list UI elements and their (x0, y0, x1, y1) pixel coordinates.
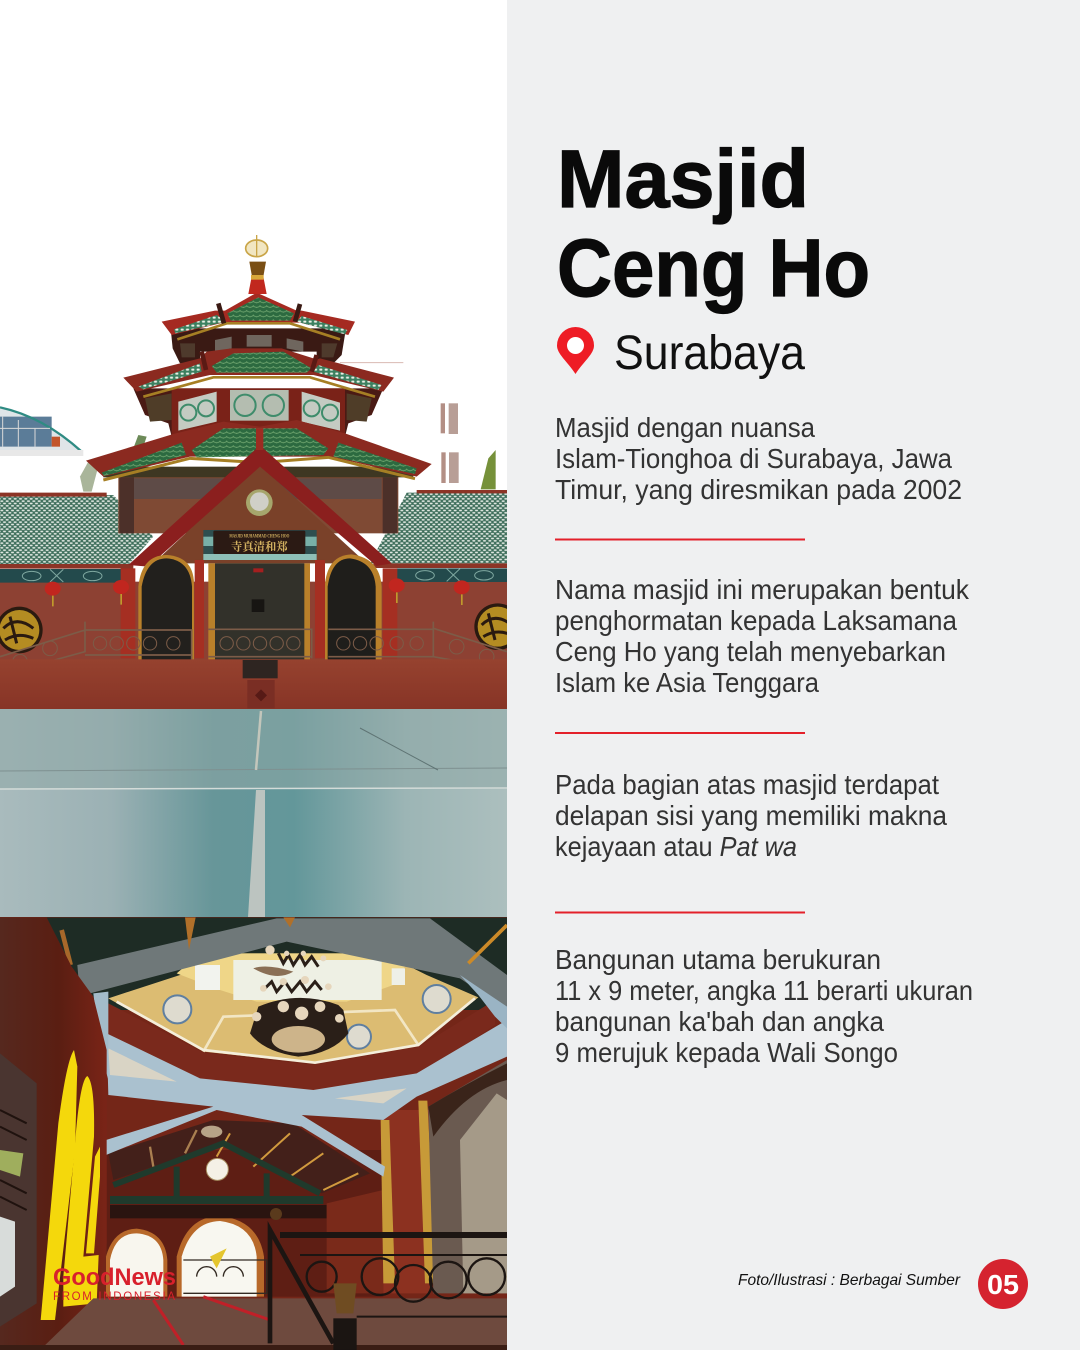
second tier roof (123, 348, 394, 397)
text block 2 (555, 574, 970, 698)
title: Masjid (557, 134, 809, 225)
text block 3: delapan sisi yang memiliki makna (555, 800, 947, 831)
text block 3: Pada bagian atas masjid terdapat (555, 769, 939, 800)
plaque (243, 660, 278, 708)
wooden roof ribs (108, 1120, 370, 1193)
photo credit: Foto/Ilustrasi : Berbagai Sumber (738, 1272, 961, 1289)
text block 4: bangunan ka'bah dan angka (555, 1006, 884, 1037)
logo: GoodNews from Indonesia (53, 1264, 176, 1303)
text block 2: Nama masjid ini merupakan bentuk (555, 574, 970, 605)
staircase railing (270, 1230, 507, 1343)
text block 4: Bangunan utama berukuran (555, 944, 881, 975)
lanterns (45, 578, 470, 606)
newel post (270, 1208, 357, 1350)
entrance sign board: MASJID MUHAMMAD CHENG HOO (229, 535, 290, 540)
right gold pillars and walls (327, 1060, 507, 1293)
logo tagline: FROM INDONESIA (53, 1291, 175, 1303)
yellow stained windows (41, 1050, 100, 1320)
grey upper beams (77, 918, 507, 1010)
text block 1: Masjid dengan nuansa (555, 412, 815, 443)
octagonal dome (108, 953, 478, 1063)
brick wall (0, 582, 507, 662)
text block 2: Islam ke Asia Tenggara (555, 667, 819, 698)
text block 3: kejayaan atau Pat wa (555, 831, 797, 862)
finial crown (246, 235, 268, 294)
title (557, 134, 870, 314)
ceiling shadow (0, 917, 507, 1010)
round ornament (246, 489, 273, 516)
recessed beam shadows (108, 1048, 407, 1103)
chandelier (250, 945, 348, 1057)
icon: location pin (557, 327, 594, 374)
green carved truss (110, 1143, 323, 1203)
page number badge (978, 1259, 1028, 1309)
back wall and arches (106, 1150, 383, 1297)
pagoda tiers, traced from the upper tower (86, 293, 432, 480)
title: Ceng Ho (557, 223, 870, 314)
background high-rise and trees (80, 363, 496, 492)
stepped platform (0, 659, 507, 709)
text block 4: 11 x 9 meter, angka 11 berarti ukuran (555, 975, 973, 1006)
left wall (0, 917, 107, 1350)
carpet (0, 1297, 507, 1350)
doorways (138, 554, 382, 660)
panel: text column background (507, 0, 1080, 1350)
text block 1: Islam-Tionghoa di Surabaya, Jawa (555, 443, 952, 474)
roof edge strips (0, 490, 507, 569)
photo column: mosque exterior and interior (0, 235, 507, 1350)
second tier body and glass panels (133, 388, 383, 437)
red ring beam (108, 1004, 490, 1010)
iron railing (0, 622, 507, 675)
photo: mosque interior (0, 917, 507, 1350)
text block 1: Timur, yang diresmikan pada 2002 (555, 474, 962, 505)
calligraphy medallions (0, 603, 521, 653)
top tier roof (162, 293, 355, 339)
side roof right (370, 493, 507, 563)
third tier wall (103, 467, 413, 533)
courtyard floor (0, 709, 507, 917)
page number badge: 05 (987, 1269, 1019, 1300)
top tier body (171, 328, 346, 363)
text block 2: penghormatan kepada Laksamana (555, 605, 957, 636)
wooden rafters (185, 917, 295, 950)
entrance wall under gable (153, 465, 367, 563)
text block 3 (555, 769, 947, 862)
red columns (121, 560, 397, 658)
text block 4 (555, 944, 973, 1068)
side roof left (0, 495, 153, 565)
text block 1 (555, 412, 962, 505)
text block 2: Ceng Ho yang telah menyebarkan (555, 636, 946, 667)
photo: mosque exterior (0, 0, 521, 710)
location name: Surabaya (614, 327, 805, 380)
entrance sign board: 寺真清和郑 (231, 539, 288, 555)
logo wordmark: GoodNews (53, 1264, 176, 1291)
third tier roof (86, 420, 432, 480)
gable beams (128, 448, 392, 567)
entrance sign board (203, 530, 317, 560)
background dome building (0, 407, 83, 456)
text block 4: 9 merujuk kepada Wali Songo (555, 1037, 898, 1068)
ceiling lamp (201, 1126, 222, 1138)
decorated frieze (0, 568, 507, 583)
light blue crossing beams (106, 1020, 507, 1177)
